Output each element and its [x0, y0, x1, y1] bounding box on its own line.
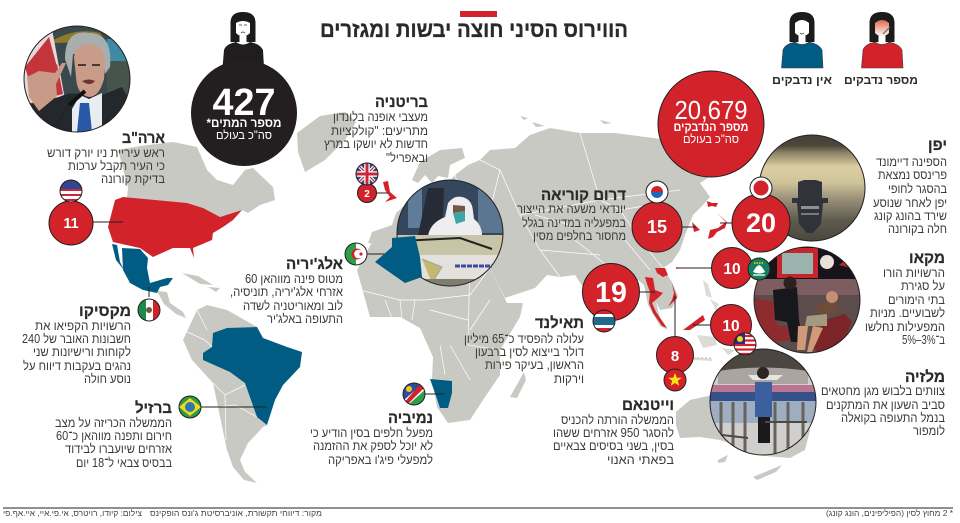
land: Indonesia and Philippines [693, 280, 735, 361]
count: Malaysia [710, 304, 752, 346]
count: Thailand [582, 264, 640, 320]
text: Namibia: למפעלי פיג'ו באפריקה [328, 453, 433, 467]
text: Vietnam: וייטנאם [622, 397, 674, 414]
deaths number: 427 [212, 82, 276, 124]
text: Japan [873, 137, 947, 236]
text: Thailand: וירקות [554, 372, 584, 386]
count: Britain [358, 184, 376, 202]
text: Japan: חלה בקורונה [888, 222, 947, 236]
text: Japan: יפן [928, 137, 947, 154]
country: Brazil [203, 327, 302, 425]
marker: USA [49, 180, 93, 245]
text: Algeria: מטוס פינה מווהאן 60 [245, 272, 343, 286]
text: South Korea: דרום קוריאה [541, 187, 626, 204]
text: Mexico: נהגים בעקבות דיווח על [23, 359, 131, 373]
text: Mexico: לקוחות ורישיונות שני [33, 345, 131, 359]
infected circle [658, 71, 764, 177]
text: Japan: פרינסס נמצאת [878, 168, 947, 182]
infected total [658, 71, 764, 177]
text: Mexico: מקסיקו [79, 303, 131, 320]
deaths label: מספר המתים* [206, 116, 282, 130]
text: Thailand: עלולה להפסיד כ־65 מיליון [464, 332, 584, 346]
text: Macau: על סגירת [901, 279, 945, 293]
marker: Britain [356, 163, 378, 202]
text: USA: ראש עיריית ניו יורק דורש [47, 146, 165, 160]
text: Japan: יפן לאחר שנוסע [873, 196, 947, 210]
text: Brazil: חירום ותפנה מווהאן כ־60 [56, 429, 172, 443]
count: USA [49, 201, 93, 245]
icon: infected person [862, 12, 903, 68]
text: Brazil: אזרחים שיועברו לבידוד [65, 442, 172, 456]
marker: Vietnam [656, 336, 694, 391]
title: הווירוס הסיני חוצה יבשות ומגזרים [320, 17, 628, 42]
text: Malaysia: צוותים בלבוש מגן מחטאים [821, 384, 945, 398]
text: Thailand [464, 315, 584, 386]
land: Greenland [297, 112, 356, 172]
infected sublabel: סה"כ בעולם [683, 132, 739, 146]
land: Australia [676, 385, 810, 458]
text: USA [47, 130, 165, 186]
land: Madagascar [510, 372, 526, 398]
text: Japan: הספינה דיימונד [876, 155, 947, 169]
text: Malaysia [821, 369, 945, 438]
text: Vietnam: הממשלה הורתה להכניס [561, 413, 674, 427]
marker: Thailand [582, 264, 640, 332]
marker: Macau [712, 248, 770, 288]
text: Algeria: לוב ומאוריטניה לשדה [243, 299, 343, 313]
text: Malaysia: בנמל התעופה בקואלה [841, 411, 945, 425]
text: Brazil: הממשלה הכריזה על מצב [55, 416, 172, 430]
country: Malaysia Borneo [683, 315, 705, 330]
text: Britain: בריטניה [375, 94, 428, 111]
land: Central America and Caribbean [157, 273, 220, 318]
land: Scandinavia and Britain region [412, 148, 465, 183]
photo credit: צילום: קיודו, רויטרס, אי.פי.איי, איי.אף.פי [3, 508, 142, 518]
text: Malaysia: לומפור [913, 424, 945, 438]
legend label: infected: מספר נדבקים [844, 75, 918, 87]
infected number: 20,679 [674, 97, 748, 125]
land: North America [118, 142, 275, 217]
photo: bus driver in Algeria [397, 180, 506, 287]
text: Mexico: נוסע חולה [84, 372, 131, 386]
text: Algeria [230, 256, 343, 326]
world map [93, 112, 810, 483]
flag: Mexico [138, 299, 160, 321]
text: Vietnam: בפאתי האנוי [607, 453, 675, 467]
photo: Kuala Lumpur airport carts [710, 349, 816, 457]
flag: Japan [750, 177, 772, 199]
country: Namibia [430, 379, 452, 408]
text: Algeria: אלג'יריה [286, 256, 343, 273]
land: Eurasia [368, 128, 720, 330]
text: Britain: ובאפריל" [386, 151, 428, 165]
text: Malaysia: סביב השעון את המתקנים [826, 398, 945, 412]
count: Japan [732, 194, 790, 252]
text: South Korea: יונדאי משעה את הייצור [517, 202, 626, 216]
marker: Britain: 2 [364, 189, 370, 200]
country: Mexico [112, 244, 173, 293]
land: Africa [357, 237, 523, 423]
text: Macau: לשבועיים. מניות [870, 306, 945, 320]
photo: Macau casino [754, 247, 860, 353]
flag: Macau [748, 258, 770, 280]
deaths sublabel: סה"כ בעולם [216, 128, 272, 142]
text: South Korea: במפעליה במדינה בגלל [522, 216, 626, 230]
icon: mourning person [222, 12, 264, 68]
text: Thailand: הראשון, בעיקר פירות [485, 358, 584, 372]
text: South Korea: מחסור בחלפים מסין [533, 229, 626, 243]
text: Britain: מעצבי אופנה בלונדון [333, 110, 428, 124]
text: Namibia: נמיביה [388, 410, 433, 427]
text: USA: כי העיר תקבל ערכות [68, 159, 165, 173]
icon: healthy person [782, 12, 823, 68]
text: Macau: מקאו [909, 250, 945, 267]
marker: South Korea: 15 [647, 217, 667, 237]
footnote: * 2 מחוץ לסין (הפיליפינים, הונג קונג) [826, 508, 954, 518]
text: Vietnam: בסין, בשני בסיסים צבאיים [553, 439, 674, 453]
country: United Kingdom [383, 181, 397, 202]
legend: infected [844, 12, 918, 87]
dashed line near Indonesia [693, 357, 713, 359]
text: Malaysia: מלזיה [905, 369, 945, 386]
count: South Korea [632, 202, 682, 252]
country: United States [108, 197, 242, 258]
country: Thailand and Indochina [645, 268, 677, 328]
flag: Malaysia [734, 333, 756, 355]
infected label: מספר הנדבקים [674, 120, 748, 134]
text: Brazil: ברזיל [135, 400, 172, 417]
flag: Thailand [593, 310, 615, 332]
text: Algeria: אזרחי אלג'יריה, תוניסיה, [230, 285, 343, 299]
flag: Algeria [345, 243, 367, 265]
leader lines [93, 193, 732, 407]
border lines [183, 133, 680, 440]
text: Macau: הרשויות הורו [883, 266, 945, 280]
text: Mexico: חשבונות האובר של 240 [22, 332, 131, 346]
text: Japan: שירד בהונג קונג [874, 209, 947, 223]
flag: South Korea [646, 181, 668, 203]
text: Mexico [22, 303, 131, 386]
legend label: no infected: אין נדבקים [772, 75, 832, 87]
marker: Malaysia: 10 [722, 318, 740, 335]
text: Brazil [55, 400, 172, 470]
legend: no infected [772, 12, 832, 87]
flag: Vietnam [664, 369, 686, 391]
flag: Namibia [402, 382, 426, 406]
footer [3, 508, 954, 518]
land: New Zealand and Tasmania [718, 444, 800, 480]
text: USA: ארה"ב [122, 130, 165, 147]
country: South Korea [692, 222, 700, 232]
deaths circle [191, 60, 297, 166]
marker: Thailand: 19 [595, 277, 627, 309]
text: Macau: המפעילות נחלשו [865, 320, 945, 334]
count: Macau [712, 248, 752, 288]
country: Algeria [375, 236, 422, 283]
marker: Japan [732, 177, 790, 252]
deaths total [191, 12, 297, 166]
text: USA: בדיקת קורונה [101, 172, 165, 186]
source: מקור: דיווחי תקשורת, אוניברסיטת ג'ונס הופקינס [150, 508, 322, 518]
marker: Japan: 20 [746, 208, 776, 238]
text: Japan: בהסגר לחופי [888, 182, 947, 196]
text: Brazil: בבסיס צבאי ל־18 יום [76, 456, 172, 470]
photo: Diamond Princess cruise ship [759, 135, 865, 241]
text: Britain: מתריעים: "קולקציות [331, 124, 428, 138]
text: Vietnam: להסגר 950 אזרחים ששהו [553, 426, 674, 440]
text: Namibia [310, 410, 433, 467]
text: Macau: ב־3%–5% [902, 333, 945, 347]
text: Britain: חדשות לא יושקו במרץ [324, 137, 428, 151]
text: South Korea [517, 187, 626, 243]
flag: Britain [356, 163, 378, 185]
flag: Brazil [179, 396, 201, 418]
text: Thailand: תאילנד [535, 315, 584, 332]
text: Britain [324, 94, 428, 165]
photo: New York mayor [22, 26, 132, 134]
marker: South Korea [632, 181, 682, 252]
marker: Malaysia [710, 304, 756, 355]
text: Macau [865, 250, 945, 347]
text: Vietnam [553, 397, 675, 467]
bus sign text [455, 264, 492, 268]
marker: USA: 11 [63, 216, 79, 232]
land: Arctic islands [520, 116, 612, 127]
country: Japan [707, 201, 727, 239]
text: Macau: בתי הימורים [888, 293, 945, 307]
marker: Vietnam: 8 [671, 348, 679, 365]
land: South America [183, 305, 267, 483]
text: Mexico: הרשויות הקפיאו את [35, 319, 131, 333]
title accent bar [460, 11, 497, 17]
text: Algeria: התעופה באלג'יר [267, 312, 343, 326]
flag: USA [60, 180, 82, 202]
marker: Macau: 10 [723, 261, 741, 278]
text: Namibia: לא יוכל לספק את ההזמנה [313, 439, 433, 453]
count: Vietnam [656, 336, 694, 374]
text: Namibia: מפעל חלפים בסין הודיע כי [310, 426, 433, 440]
Macau marker [676, 267, 678, 269]
text: Thailand: דולר בייצוא לסין ברבעון [475, 345, 584, 359]
